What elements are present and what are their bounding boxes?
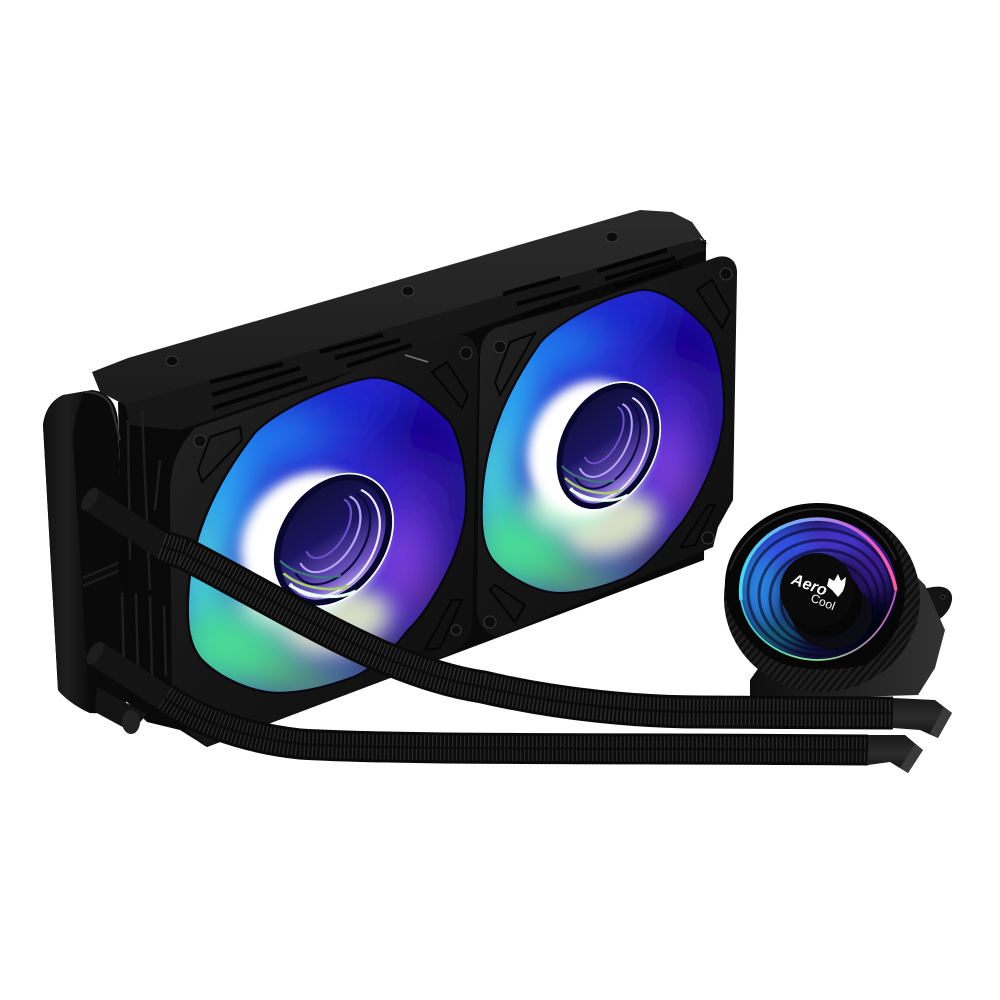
pump body: [750, 525, 945, 700]
radiator vent slots: [210, 250, 682, 408]
fan 1 frame details: [194, 347, 472, 635]
lower tube end sleeve: [868, 735, 923, 773]
pump carbon face: [724, 504, 920, 692]
tank front plate: [43, 392, 90, 713]
radiator core behind fans: [118, 240, 706, 747]
pump top rim: [725, 503, 905, 669]
radiator: [43, 210, 708, 747]
upper tube end sleeve: [893, 698, 952, 738]
lower braided tube: [165, 698, 868, 750]
lower fitting stub: [95, 687, 147, 732]
fan 1: [163, 334, 485, 747]
fan 2: [460, 256, 740, 636]
fan 2 frame details: [484, 268, 732, 628]
radiator top strip: [92, 210, 708, 405]
radiator fins on left: [83, 410, 166, 676]
logo leaf: [827, 574, 846, 597]
logo word Cool: Cool: [809, 591, 837, 613]
radiator shelf under strip: [125, 238, 706, 430]
pump infinity mirror: [739, 520, 897, 660]
upper tube left stub: [78, 485, 165, 548]
product illustration: liquid CPU cooler: [43, 210, 952, 773]
pump mirror rings: [748, 529, 892, 655]
pump mounting ear: [915, 587, 952, 622]
pump cap steps: [792, 581, 872, 649]
fan 1 frame: [170, 334, 478, 747]
upper braided tube: [162, 546, 893, 713]
logo: [788, 571, 846, 613]
fan 1 rotor and light: [163, 367, 485, 711]
radiator screws: [166, 232, 618, 366]
lower tube left stub: [83, 639, 172, 703]
liquid tubes: [78, 485, 952, 773]
pump light ring: [741, 519, 896, 660]
fan 2 rotor and light: [460, 280, 740, 610]
pump cap: [780, 553, 854, 627]
fan 2 frame: [477, 256, 737, 636]
left end tank: [43, 390, 128, 713]
logo word Aero: Aero: [788, 571, 829, 600]
pump block: [724, 503, 952, 700]
